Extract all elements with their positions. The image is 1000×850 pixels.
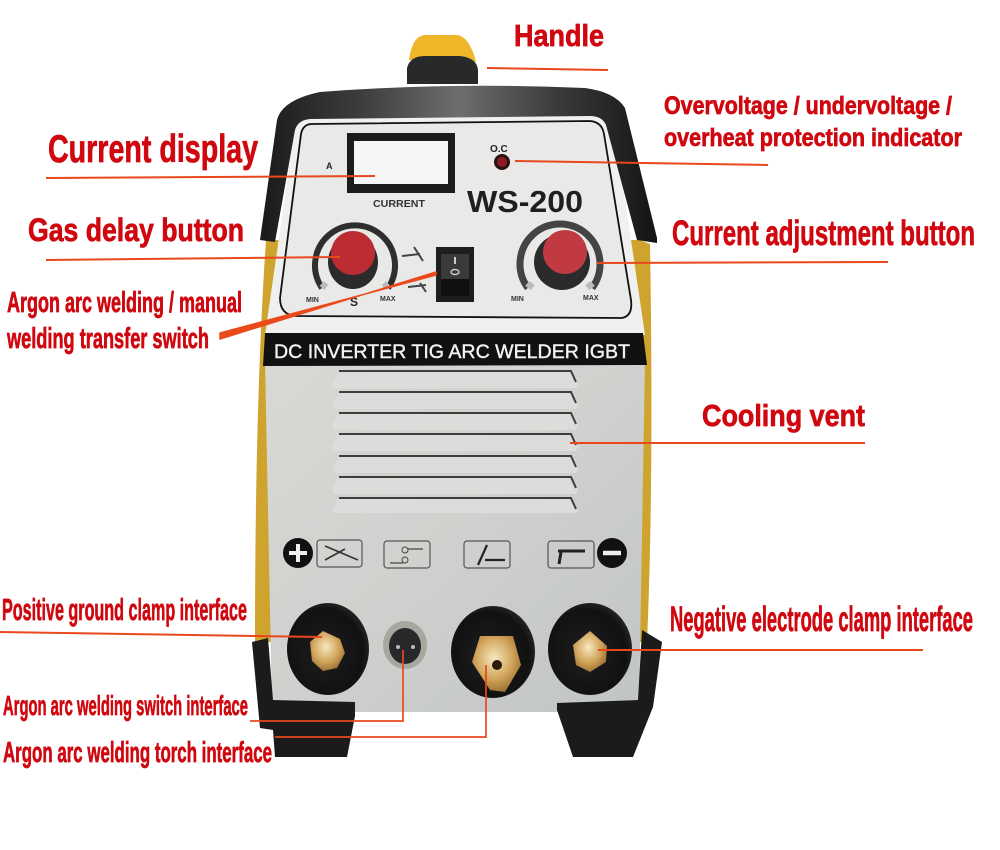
model name: WS-200 [467, 184, 583, 219]
torch socket [451, 606, 535, 698]
negative socket [548, 603, 632, 695]
label: handle [487, 18, 608, 70]
label: torch interface: Argon arc welding torch interface [3, 737, 272, 769]
welder machine illustration [252, 35, 662, 757]
grey front panel [265, 360, 645, 712]
label: switch interface [3, 650, 403, 721]
label: gas delay button [28, 212, 340, 260]
control panel face [265, 110, 645, 335]
label: cooling vent: Cooling vent [702, 398, 865, 433]
label: protection indicator: overheat protection indicator [664, 124, 962, 152]
O.C indicator: O.C [490, 144, 508, 155]
label: handle: Handle [514, 18, 604, 53]
transfer rocker switch [436, 247, 474, 302]
label: switch interface: Argon arc welding switch interface [3, 690, 248, 721]
panel outline [280, 121, 631, 318]
current display: A [326, 161, 333, 171]
left gas delay dial: S [350, 295, 358, 309]
welding mode icons [402, 247, 426, 292]
left gas delay dial [306, 225, 396, 309]
switch socket [383, 621, 427, 669]
feet and lower frame [252, 630, 662, 757]
label: transfer switch [6, 272, 436, 355]
handle [407, 35, 478, 84]
current display: CURRENT [373, 198, 426, 210]
label: gas delay button: Gas delay button [28, 212, 244, 248]
label: current display: Current display [48, 128, 258, 171]
label: positive clamp [0, 592, 322, 637]
model band: DC INVERTER TIG ARC WELDER IGBT [274, 342, 630, 363]
O.C indicator [490, 144, 510, 170]
left gas delay dial: MIN [306, 297, 319, 304]
right current dial: MAX [583, 295, 599, 302]
top black cap [260, 86, 657, 243]
socket symbols row [283, 538, 627, 568]
label: positive clamp: Positive ground clamp interface [2, 592, 247, 627]
cooling vent [332, 370, 578, 513]
label: protection indicator: Overvoltage / undervoltage / [664, 92, 952, 120]
right current dial [511, 224, 600, 303]
label: transfer switch: welding transfer switch [6, 323, 209, 355]
label: transfer switch: Argon arc welding / manual [7, 287, 242, 319]
model band [263, 333, 647, 366]
positive socket [287, 603, 369, 695]
label: torch interface [3, 665, 486, 769]
left gas delay dial: MAX [380, 296, 396, 303]
yellow side panels [255, 240, 651, 642]
right current dial: MIN [511, 296, 524, 303]
current display [326, 133, 455, 210]
label: protection indicator [515, 92, 962, 165]
